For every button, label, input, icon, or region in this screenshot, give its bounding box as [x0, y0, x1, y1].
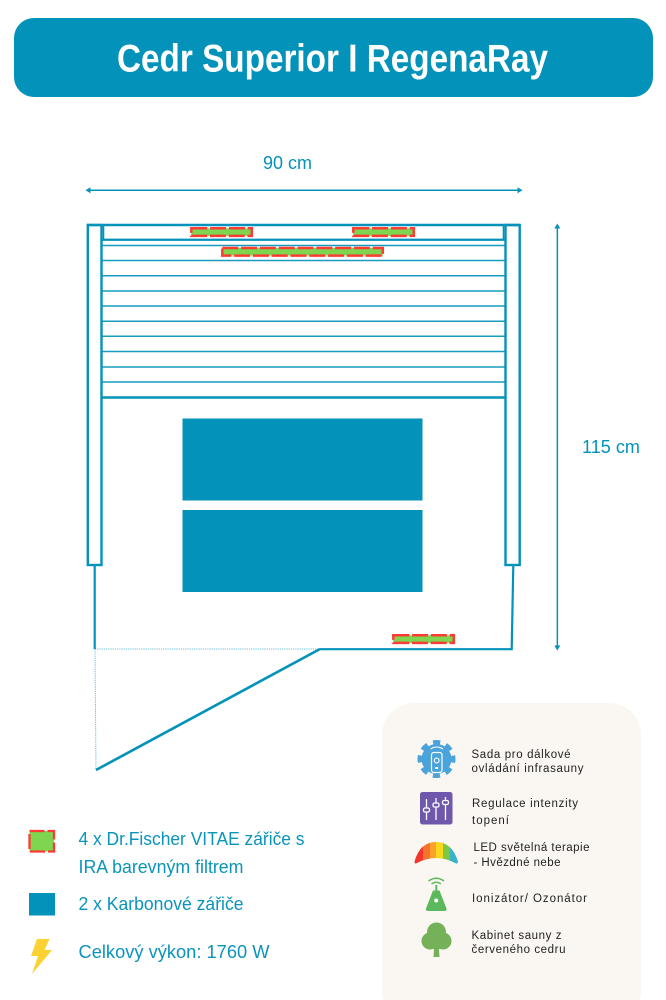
icon: gear with remote [420, 742, 453, 776]
title banner: Cedr Superior I RegenaRay [117, 38, 548, 80]
legend text: IRA heaters: IRA barevným filtrem [78, 856, 244, 877]
icon: ionizer [426, 878, 447, 911]
icon: tree [422, 922, 452, 957]
legend [29, 828, 304, 974]
width label: 90 cm [263, 152, 312, 173]
legend text: IRA heaters: 4 x Dr.Fischer VITAE zářiče s [78, 828, 304, 849]
icon: sliders [420, 792, 452, 824]
legend icon: IRA heater [30, 831, 54, 852]
sauna floor plan [87, 225, 520, 770]
carbon heater lower [182, 510, 422, 592]
text: red cedar cabin: červeného cedru [472, 944, 566, 956]
height label: 115 cm [582, 436, 640, 457]
text: remote control: ovládání infrasauny [472, 763, 584, 775]
IRA heater front [393, 635, 454, 643]
legend icon: lightning [31, 939, 52, 974]
features panel [382, 703, 641, 1000]
text: LED light therapy: - Hvězdné nebe [474, 857, 560, 869]
legend icon: carbon heater [29, 893, 55, 916]
text: red cedar cabin: Kabinet sauny z [472, 930, 562, 942]
legend text: total power: Celkový výkon: 1760 W [78, 941, 270, 962]
text: intensity regulation: topení [472, 815, 510, 827]
text: remote control: Sada pro dálkové [472, 749, 570, 761]
title banner [14, 18, 653, 97]
legend text: carbon heaters: 2 x Karbonové zářiče [78, 893, 244, 914]
IRA heater back left [191, 228, 252, 236]
icon: rainbow LED [414, 842, 458, 864]
text: ionizer ozonator: Ionizátor/ Ozonátor [472, 893, 587, 905]
carbon heater upper [182, 418, 422, 500]
IRA heater bench [222, 248, 383, 256]
text: intensity regulation: Regulace intenzity [472, 798, 578, 810]
width dimension arrow [86, 187, 522, 193]
height dimension arrow [554, 224, 560, 650]
text: LED light therapy: LED světelná terapie [474, 842, 590, 854]
IRA heater back right [353, 228, 414, 236]
